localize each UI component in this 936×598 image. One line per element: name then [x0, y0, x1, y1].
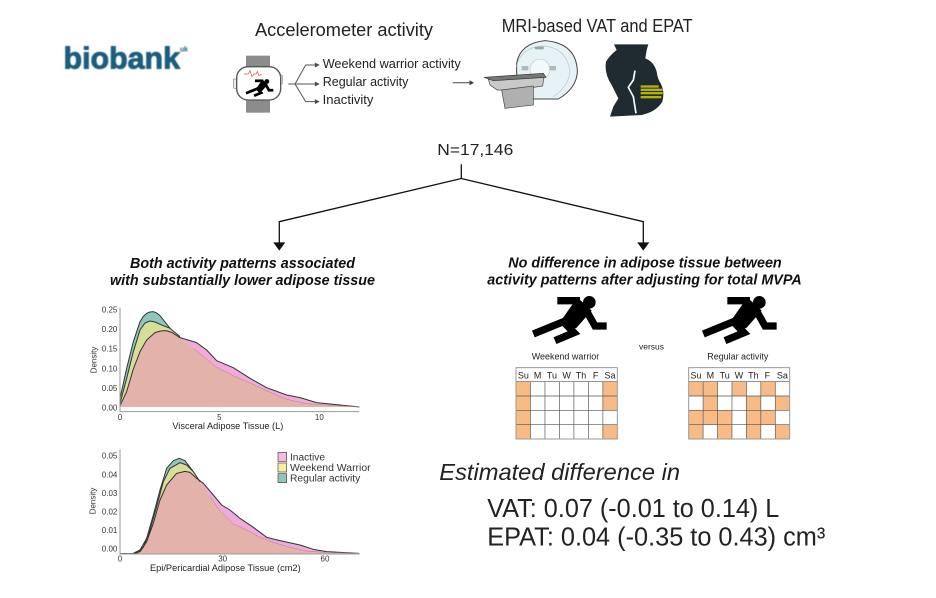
chart: EPAT density: 60: [321, 555, 330, 564]
chart: EPAT density: Epi/Pericardial Adipose Tissue (cm2): [150, 563, 301, 573]
calendar: regular activity: [689, 368, 790, 439]
chart: EPAT density: 0: [118, 555, 123, 564]
chart: VAT density: [90, 305, 359, 431]
icon: runner, regular activity: [703, 296, 777, 341]
chart: EPAT density: 0.00: [102, 545, 118, 554]
text: activity categories: Weekend warrior activity: [323, 56, 461, 71]
chart: VAT density: 0.20: [102, 325, 118, 334]
arrow: to MRI: [453, 81, 473, 84]
label: regular activity: Regular activity: [707, 351, 769, 361]
chart: VAT density: 10: [315, 413, 324, 422]
chart: EPAT density: 0.04: [102, 470, 118, 479]
text: activity categories: [323, 56, 461, 107]
icon: runner, weekend warrior: [533, 296, 607, 341]
text: estimated differences: [487, 495, 825, 552]
logo: UK Biobank: biobank: [64, 40, 181, 75]
legend: Weekend Warrior: [290, 463, 371, 474]
chart: EPAT density: 0.02: [102, 507, 118, 516]
chart: EPAT density: 0.05: [102, 452, 118, 461]
text: activity categories: Regular activity: [323, 74, 409, 89]
overlap area: [120, 331, 359, 407]
icon: torso with adipose tissue: [606, 44, 663, 117]
chart: EPAT density: 30: [218, 555, 228, 564]
icon: MRI scanner: [484, 41, 577, 108]
heading: left finding: [110, 256, 375, 289]
heading: right finding: [487, 255, 802, 288]
text: estimated difference heading: Estimated difference in: [439, 459, 680, 485]
chart: VAT density: 0: [118, 413, 123, 422]
calendar: weekend warrior: Su: [518, 370, 529, 380]
calendar: regular activity: Th: [748, 370, 759, 380]
chart: VAT density: 0.00: [102, 403, 118, 412]
calendar: weekend warrior: Sa: [604, 370, 615, 380]
calendar: weekend warrior: Tu: [547, 370, 557, 380]
calendar: weekend warrior: W: [562, 370, 571, 380]
calendar: regular activity: W: [735, 370, 744, 380]
calendar: regular activity: Sa: [777, 370, 788, 380]
chart: VAT density: 5: [217, 413, 222, 422]
chart: VAT density: 0.05: [102, 384, 118, 393]
calendar: weekend warrior: M: [534, 370, 541, 380]
heading: MRI-based VAT and EPAT: MRI-based VAT and EPAT: [502, 16, 693, 36]
chart: EPAT density: 0.01: [102, 526, 118, 535]
label: weekend warrior: Weekend warrior: [532, 351, 599, 361]
text: activity categories: Inactivity: [323, 92, 374, 107]
calendar: regular activity: Tu: [720, 370, 730, 380]
calendar: regular activity: F: [765, 370, 771, 380]
text: sample size: N=17,146: [437, 142, 513, 159]
heading: right finding: activity patterns after adjusting for total MVPA: [487, 272, 802, 288]
logo: UK Biobank: uk: [180, 45, 189, 54]
text: versus: versus: [639, 341, 664, 351]
heading: left finding: Both activity patterns associated: [130, 256, 356, 272]
heading: left finding: with substantially lower adipose tissue: [110, 273, 375, 289]
calendar: weekend warrior: [516, 368, 617, 439]
icon: smartwatch with runner: [233, 56, 282, 113]
legend: Inactive: [290, 452, 325, 463]
calendar: weekend warrior: Th: [576, 370, 586, 380]
heading: right finding: No difference in adipose tissue between: [508, 255, 782, 271]
calendar: weekend warrior: F: [593, 370, 599, 380]
chart: EPAT density: [88, 449, 371, 573]
arrows: activity categories: [288, 63, 319, 103]
heading: accelerometer activity: Accelerometer activity: [255, 20, 433, 40]
overlap area: [133, 471, 359, 553]
text: estimated differences: EPAT: 0.04 (-0.35 to 0.43) cm³: [487, 524, 825, 552]
chart: EPAT density: Density: [88, 488, 97, 514]
chart: VAT density: Visceral Adipose Tissue (L): [172, 421, 283, 431]
chart: VAT density: 0.15: [102, 345, 118, 354]
chart: VAT density: 0.10: [102, 364, 118, 373]
chart: VAT density: 0.25: [102, 305, 118, 314]
chart: VAT density: Density: [90, 347, 99, 373]
calendar: regular activity: Su: [690, 370, 701, 380]
legend: Regular activity: [290, 474, 360, 485]
legend: [278, 452, 371, 485]
text: estimated differences: VAT: 0.07 (-0.01 to 0.14) L: [487, 495, 779, 523]
chart: EPAT density: 0.03: [102, 489, 118, 498]
calendar: regular activity: M: [707, 370, 714, 380]
arrows: split to two findings: [274, 164, 648, 250]
